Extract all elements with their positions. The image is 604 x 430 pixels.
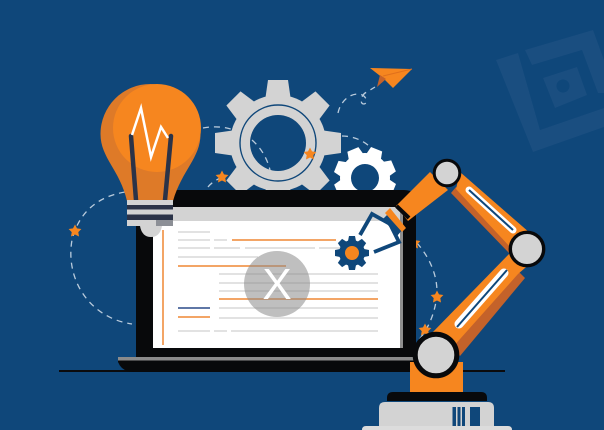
- dashed paths: [71, 87, 437, 342]
- gripped gear: [335, 236, 369, 270]
- robot arm: [335, 160, 544, 430]
- icon: large gear: [215, 80, 341, 206]
- laptop base: [118, 357, 414, 372]
- icon: small white gear: [325, 138, 405, 218]
- arm mount: [410, 362, 463, 392]
- icon: light bulb: [100, 84, 201, 237]
- gripper: [360, 212, 404, 252]
- pedestal: [379, 402, 494, 430]
- joint: base: [415, 334, 457, 376]
- ground line: [59, 370, 505, 372]
- laptop: [118, 190, 416, 372]
- document text lines: [162, 230, 378, 345]
- middle arm: [451, 172, 530, 254]
- joint: elbow: [510, 232, 544, 266]
- screen: [153, 207, 403, 348]
- upper arm: [396, 172, 448, 221]
- barcode: [452, 407, 480, 426]
- joint: top: [434, 160, 460, 186]
- icon: paper plane: [370, 68, 412, 88]
- filament: [131, 136, 171, 200]
- bulb base: [127, 200, 173, 237]
- watermark logo: [496, 30, 604, 152]
- laptop body: [136, 190, 416, 357]
- close button: [244, 251, 310, 317]
- icon: stars: [69, 170, 443, 336]
- arm collar: [396, 206, 409, 218]
- close button: X: [262, 260, 292, 309]
- base plate: [387, 392, 487, 401]
- lower arm: [430, 253, 532, 356]
